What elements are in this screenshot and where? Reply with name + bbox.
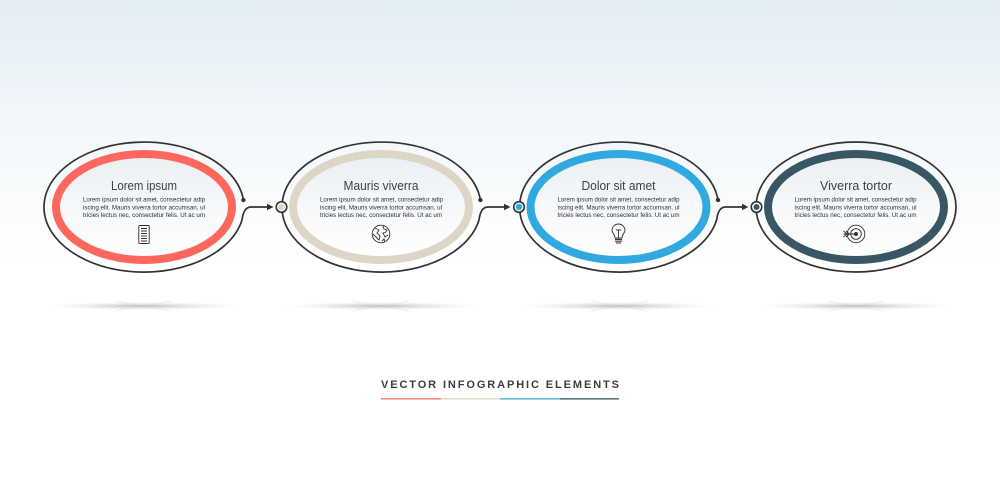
heading 1: Lorem ipsum bbox=[111, 179, 177, 193]
shadow 4 bbox=[759, 300, 953, 312]
panel: Dolor sit amet bbox=[520, 142, 748, 272]
panel: Viverra tortor bbox=[756, 142, 956, 272]
coloured ring 1 bbox=[56, 154, 232, 260]
outer outline and connector 3 bbox=[520, 142, 743, 272]
arrow head 2 bbox=[504, 204, 510, 210]
text block 3: tricies lectus nec, consectetur felis. Ut ac um bbox=[558, 212, 680, 219]
outer outline and connector 2 bbox=[282, 142, 505, 272]
text block 4: tricies lectus nec, consectetur felis. Ut ac um bbox=[794, 212, 916, 219]
text block 4: iscing elit. Mauris viverra tortor accumsan, ul bbox=[794, 204, 916, 211]
icon: target bbox=[844, 225, 865, 243]
panel: Lorem ipsum bbox=[44, 142, 274, 272]
heading 4: Viverra tortor bbox=[820, 179, 892, 193]
text block 1: Lorem ipsum dolor sit amet, consectetur adip bbox=[83, 197, 205, 204]
text block 3 bbox=[558, 197, 680, 219]
text block 1: tricies lectus nec, consectetur felis. Ut ac um bbox=[83, 212, 205, 219]
text block 4 bbox=[794, 197, 917, 219]
icon: light bulb bbox=[612, 224, 625, 243]
connector dot 3 bbox=[716, 198, 720, 202]
text block 2: tricies lectus nec, consectetur felis. Ut ac um bbox=[320, 212, 442, 219]
outer outline bbox=[756, 142, 956, 272]
node 2 bbox=[514, 202, 524, 212]
connector dot 2 bbox=[478, 198, 483, 202]
shadow 3 bbox=[522, 300, 716, 312]
coloured ring 4 bbox=[768, 154, 944, 260]
node 1 bbox=[276, 202, 287, 212]
text block 3: iscing elit. Mauris viverra tortor accumsan, ul bbox=[558, 204, 680, 211]
text block 2: iscing elit. Mauris viverra tortor accumsan, ul bbox=[320, 204, 442, 211]
outer outline and connector 1 bbox=[44, 142, 268, 272]
text block 3: Lorem ipsum dolor sit amet, consectetur adip bbox=[558, 197, 680, 204]
text block 1 bbox=[83, 197, 205, 219]
text block 2: Lorem ipsum dolor sit amet, consectetur adip bbox=[320, 197, 443, 204]
background bbox=[0, 0, 1000, 270]
shadow 2 bbox=[284, 300, 478, 312]
heading 3: Dolor sit amet bbox=[582, 179, 656, 193]
icon: globe bbox=[372, 225, 390, 243]
heading 2: Mauris viverra bbox=[344, 179, 419, 193]
text block 1: iscing elit. Mauris viverra tortor accumsan, ul bbox=[83, 204, 205, 211]
node 3 bbox=[751, 202, 762, 212]
shadow 1 bbox=[46, 300, 240, 312]
coloured ring 2 bbox=[293, 154, 469, 260]
footer colour rule bbox=[381, 398, 619, 400]
text block 2 bbox=[320, 197, 443, 219]
panel: Mauris viverra bbox=[282, 142, 510, 272]
footer title: VECTOR INFOGRAPHIC ELEMENTS bbox=[381, 379, 621, 391]
connector dot 1 bbox=[241, 198, 246, 202]
icon: document bbox=[139, 226, 149, 244]
arrow head 1 bbox=[267, 204, 274, 210]
text block 4: Lorem ipsum dolor sit amet, consectetur adip bbox=[794, 197, 917, 204]
coloured ring 3 bbox=[530, 154, 706, 260]
arrow head 3 bbox=[742, 204, 748, 210]
